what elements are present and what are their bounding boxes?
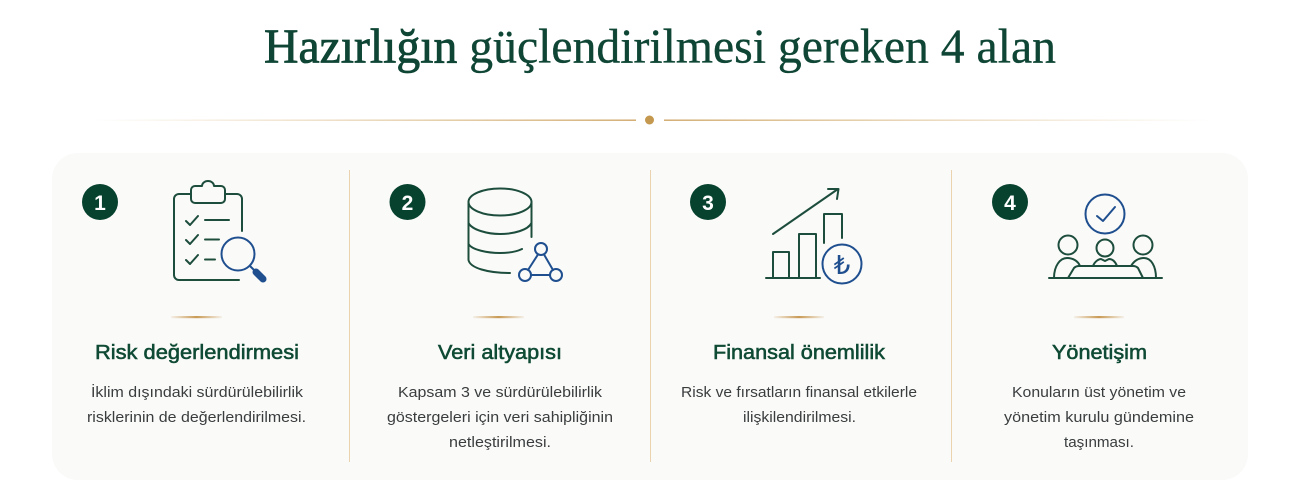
- description: İklim dışındaki sürdürülebilirlik: [91, 383, 304, 401]
- panel: four areas: [52, 153, 1248, 480]
- number badge 3: 3: [702, 192, 714, 215]
- heading: Finansal önemlilik: [713, 342, 886, 364]
- description: risklerinin de değerlendirilmesi.: [87, 409, 306, 426]
- description: ilişkilendirilmesi.: [743, 409, 856, 426]
- description: [387, 384, 613, 451]
- gold accent: [171, 316, 222, 318]
- heading: Risk değerlendirmesi: [95, 342, 299, 364]
- title: Hazırlığın güçlendirilmesi gereken 4 alan: [264, 18, 1056, 74]
- description: Risk ve fırsatların finansal etkilerle: [681, 384, 917, 401]
- description: göstergeleri için veri sahipliğinin: [387, 409, 613, 426]
- description: yönetim kurulu gündemine: [1004, 409, 1194, 426]
- number badge 1: 1: [94, 192, 106, 215]
- gold accent: [473, 316, 524, 318]
- description: netleştirilmesi.: [449, 434, 551, 451]
- heading: Yönetişim: [1052, 342, 1147, 364]
- number badge 4: 4: [1004, 192, 1016, 215]
- description: [681, 384, 917, 426]
- heading: Veri altyapısı: [438, 342, 562, 364]
- gold accent: [774, 316, 824, 318]
- icon: meeting with check mark: [1049, 194, 1162, 278]
- card 3: financial materiality: [681, 184, 917, 426]
- card 2: data infrastructure: [387, 184, 613, 451]
- description: [87, 383, 306, 426]
- description: Kapsam 3 ve sürdürülebilirlik: [398, 384, 603, 401]
- description: taşınması.: [1064, 434, 1134, 451]
- title ornament divider: [90, 116, 1210, 124]
- number badge 2: 2: [402, 192, 413, 215]
- number badge 3: [690, 184, 726, 220]
- number badge 1: [82, 184, 118, 220]
- icon: clipboard with magnifier: [174, 181, 263, 280]
- icon: growth chart with lira coin: ₺: [834, 251, 850, 281]
- number badge 2: [390, 184, 426, 220]
- description: Konuların üst yönetim ve: [1012, 384, 1186, 401]
- icon: database with network: [468, 188, 562, 281]
- gold accent: [1074, 316, 1124, 318]
- number badge 4: [992, 184, 1028, 220]
- card 1: risk assessment: [82, 181, 306, 426]
- icon: growth chart with lira coin: [766, 189, 862, 284]
- card 4: governance: [992, 184, 1194, 451]
- description: [1004, 384, 1194, 451]
